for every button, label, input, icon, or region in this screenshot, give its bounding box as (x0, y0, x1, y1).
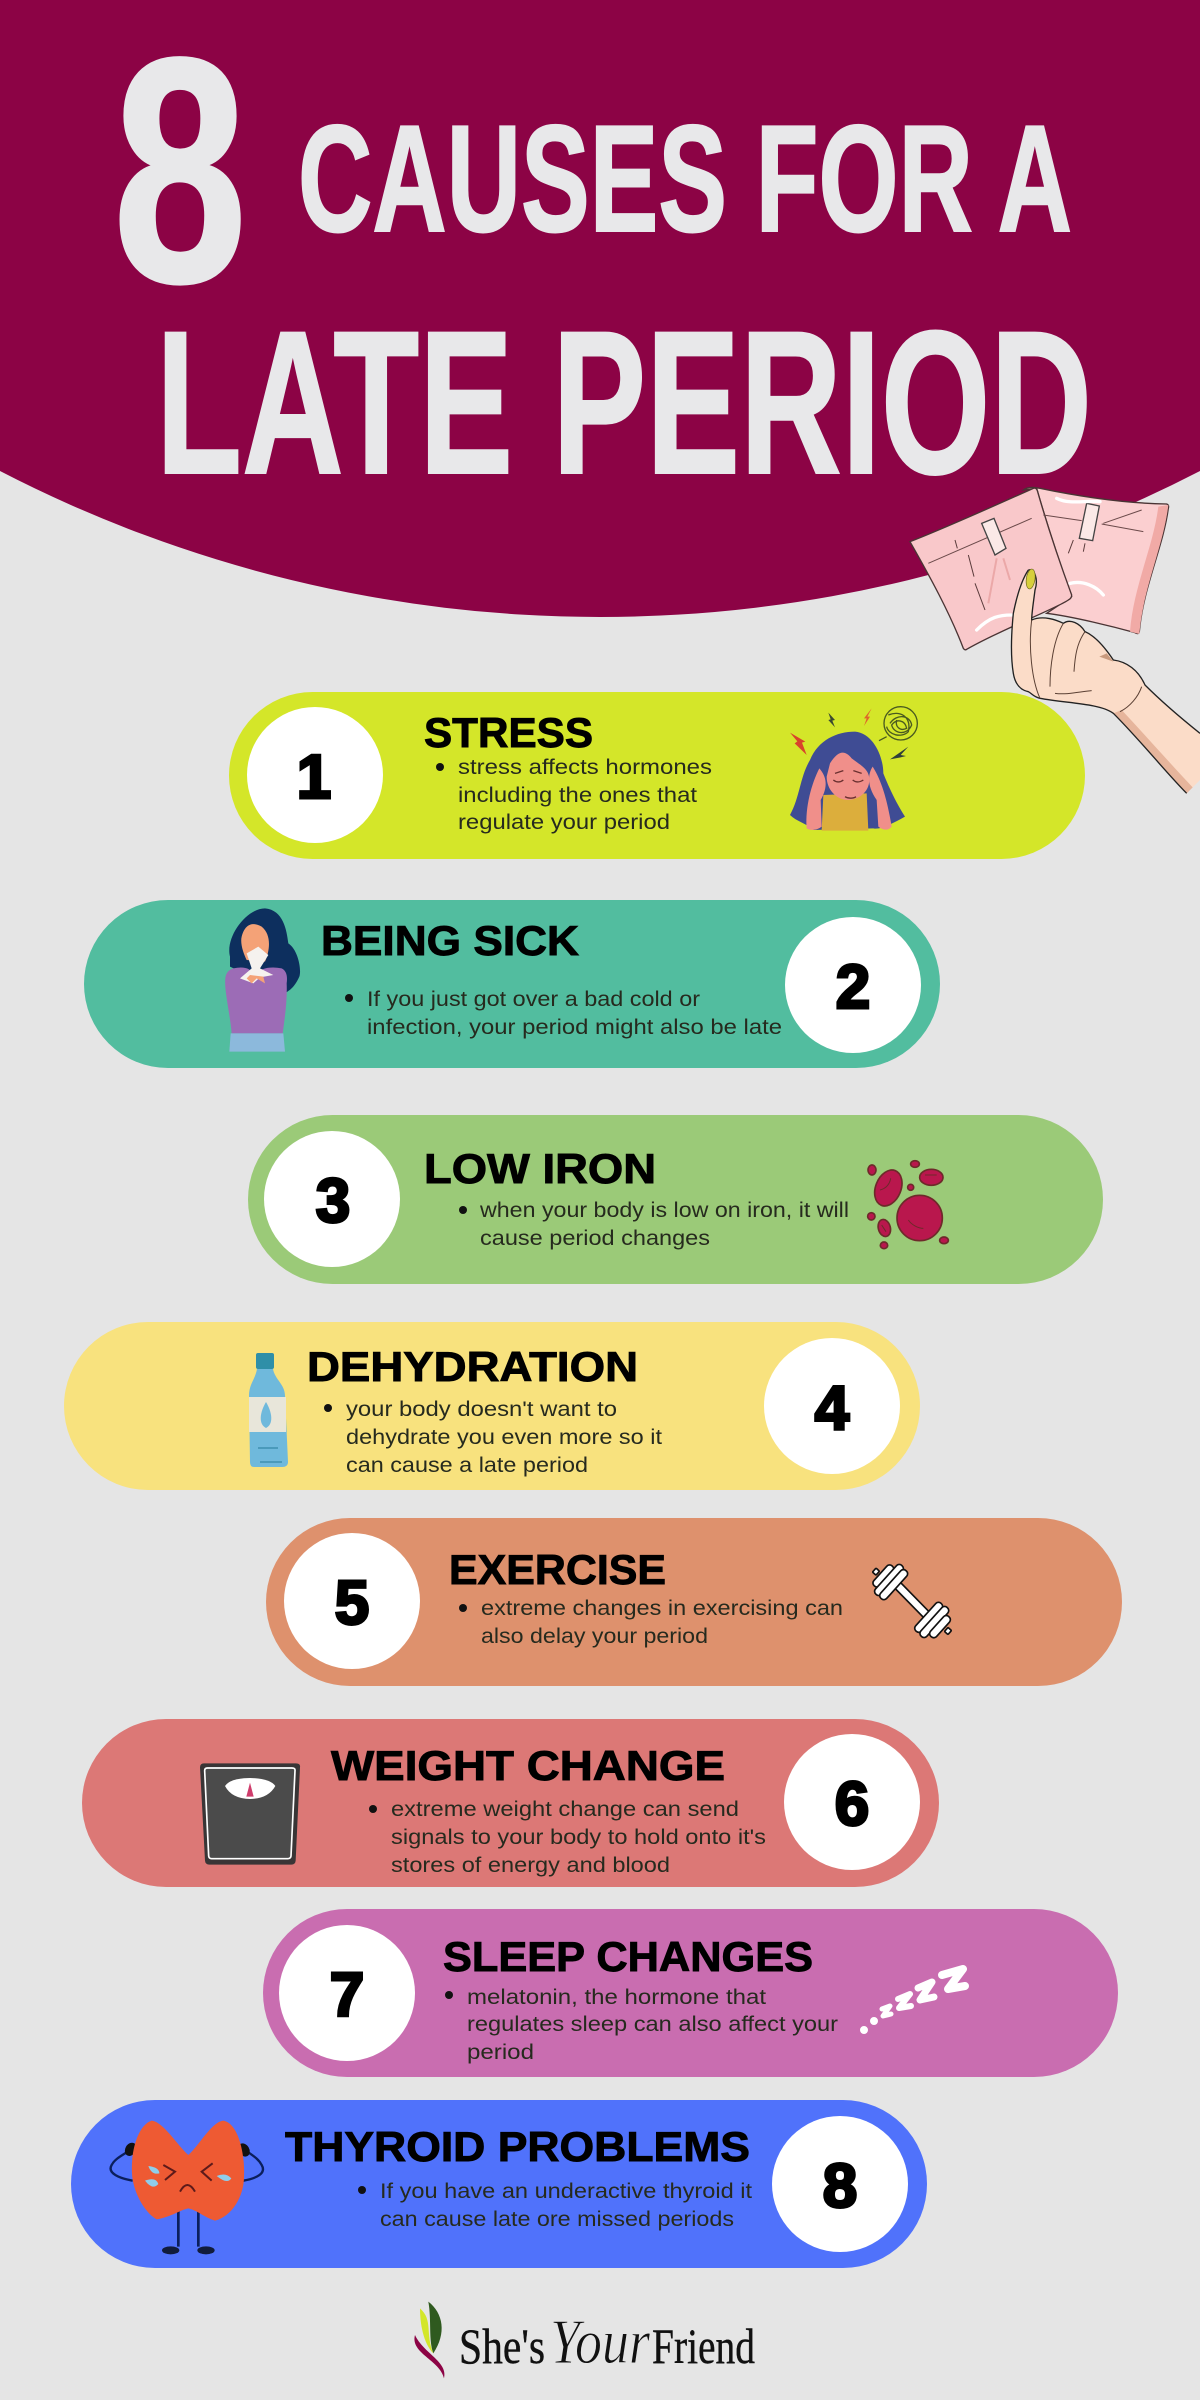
pill background (84, 900, 940, 1068)
bullet text: can cause late ore missed periods (380, 2208, 734, 2231)
number badge 2: 2 (836, 953, 870, 1022)
number badge 1 (247, 707, 383, 843)
bullet text: extreme changes in exercising can (481, 1597, 843, 1620)
number badge 4: 4 (815, 1374, 850, 1443)
bullet text: signals to your body to hold onto it's (391, 1826, 766, 1849)
title numeral 8: 8 (113, 0, 247, 349)
icon: dumbbell (871, 1563, 952, 1639)
bullet text: regulates sleep can also affect your (467, 2013, 838, 2036)
heading: LOW IRON (424, 1145, 656, 1192)
bullet text: period (467, 2041, 534, 2064)
number badge 8 (772, 2116, 908, 2252)
heading: BEING SICK (321, 917, 579, 964)
heading: EXERCISE (449, 1546, 666, 1593)
bullet text: If you have an underactive thyroid it (380, 2180, 752, 2203)
icon: water bottle (249, 1353, 288, 1467)
icon: crying thyroid (111, 2121, 263, 2254)
logo flame mark (414, 2302, 445, 2378)
panel: 1 stress (229, 692, 1085, 859)
heading: STRESS (424, 709, 593, 756)
panel: 4 dehydration (64, 1322, 920, 1490)
number badge 8: 8 (823, 2152, 857, 2221)
icon: zzz sleep (860, 1969, 965, 2034)
panel: 6 weight change (82, 1719, 939, 1887)
bullet text (369, 1798, 766, 1877)
logo wordmark: She's (459, 2318, 545, 2374)
logo wordmark: Friend (652, 2318, 755, 2374)
pill background (248, 1115, 1103, 1284)
heading: WEIGHT CHANGE (331, 1742, 725, 1789)
number badge 3: 3 (316, 1167, 350, 1236)
header banner (0, 0, 1200, 617)
bullet text: can cause a late period (346, 1454, 588, 1477)
number badge 6 (784, 1734, 920, 1870)
heading: DEHYDRATION (307, 1343, 638, 1390)
title (113, 0, 1092, 517)
pill background (229, 692, 1085, 859)
panel: 3 low iron (248, 1115, 1103, 1284)
bullet text (459, 1597, 843, 1648)
pill background (64, 1322, 920, 1490)
icon: red blood cells (868, 1161, 948, 1249)
number badge 7 (279, 1925, 415, 2061)
bullet text: melatonin, the hormone that (467, 1986, 766, 2009)
panel: 2 being sick (84, 900, 940, 1068)
logo: She's Your Friend (414, 2302, 755, 2378)
pill background (82, 1719, 939, 1887)
bullet text: when your body is low on iron, it will (479, 1199, 849, 1222)
bullet text (436, 756, 712, 834)
number badge 4 (764, 1338, 900, 1474)
bullet text (345, 988, 782, 1039)
logo wordmark: Your (550, 2306, 651, 2377)
number badge 7: 7 (330, 1961, 364, 2030)
pill background (266, 1518, 1122, 1686)
bullet text: your body doesn't want to (346, 1398, 617, 1421)
bullet text (445, 1986, 838, 2064)
number badge 5: 5 (335, 1569, 369, 1638)
bullet text: also delay your period (481, 1625, 708, 1648)
bullet text (324, 1398, 662, 1477)
icon: bathroom scale (200, 1763, 300, 1865)
bullet text: cause period changes (480, 1227, 710, 1250)
number badge 3 (264, 1131, 400, 1267)
bullet text: stores of energy and blood (391, 1854, 670, 1877)
bullet text: extreme weight change can send (391, 1798, 739, 1821)
bullet text: stress affects hormones (458, 756, 712, 779)
panel: 5 exercise (266, 1518, 1122, 1686)
bullet text: regulate your period (458, 811, 670, 834)
heading: SLEEP CHANGES (443, 1933, 813, 1980)
icon: woman sneezing (225, 908, 300, 1052)
icon: hand holding pads (910, 487, 1200, 793)
number badge 1: 1 (297, 743, 331, 812)
icon: stressed woman (790, 707, 917, 831)
bullet text: including the ones that (458, 784, 697, 807)
bullet text: dehydrate you even more so it (346, 1426, 662, 1449)
bullet text: If you just got over a bad cold or (367, 988, 700, 1011)
heading: THYROID PROBLEMS (285, 2123, 750, 2170)
pill background (263, 1909, 1118, 2077)
bullet text (459, 1199, 849, 1250)
number badge 6: 6 (835, 1770, 869, 1839)
number badge 5 (284, 1533, 420, 1669)
logo wordmark (459, 2306, 755, 2377)
bullet text: infection, your period might also be late (367, 1016, 782, 1039)
panel: 8 thyroid problems (71, 2100, 927, 2268)
pill background (71, 2100, 927, 2268)
bullet text (358, 2180, 752, 2231)
number badge 2 (785, 917, 921, 1053)
panel: 7 sleep changes (263, 1909, 1118, 2077)
